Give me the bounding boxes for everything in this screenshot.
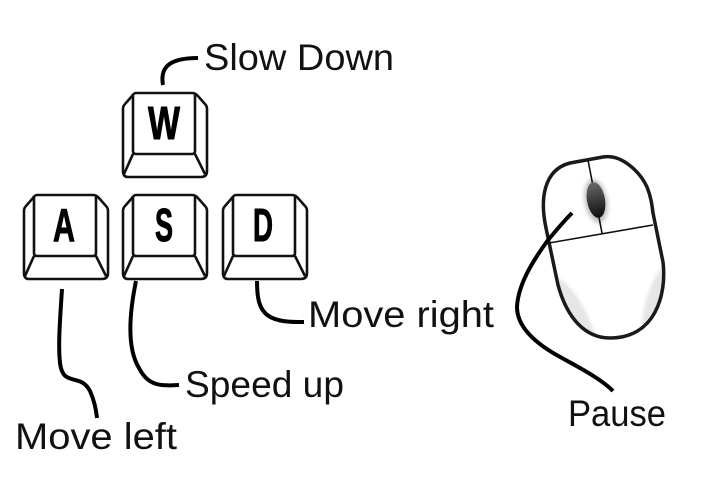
- label: Speed up: Speed up: [185, 364, 344, 405]
- key: D: [223, 195, 307, 279]
- key: D: D: [253, 199, 273, 251]
- key: S: S: [155, 199, 173, 251]
- connector: A to Move left: [59, 289, 97, 418]
- connector: S to Speed up: [130, 281, 179, 385]
- mouse body: [543, 157, 664, 338]
- button divider: [549, 160, 653, 243]
- key: W: W: [148, 97, 180, 149]
- key: A: A: [53, 199, 75, 251]
- connector: W to Slow Down: [162, 58, 198, 85]
- scroll wheel: [584, 181, 608, 219]
- label: Slow Down: Slow Down: [204, 37, 394, 78]
- key: A: [24, 195, 108, 279]
- key: S: [123, 195, 207, 279]
- label: Move left: Move left: [15, 416, 178, 457]
- wheel glow: [581, 177, 611, 225]
- connector: mouse to Pause: [517, 213, 613, 391]
- key: W: [123, 93, 207, 177]
- palm shading: [558, 266, 662, 334]
- label: Pause: Pause: [568, 393, 666, 434]
- label: Move right: Move right: [308, 294, 495, 335]
- mouse outline: [543, 157, 664, 338]
- icon: mouse: [543, 157, 672, 340]
- connector: D to Move right: [257, 281, 304, 322]
